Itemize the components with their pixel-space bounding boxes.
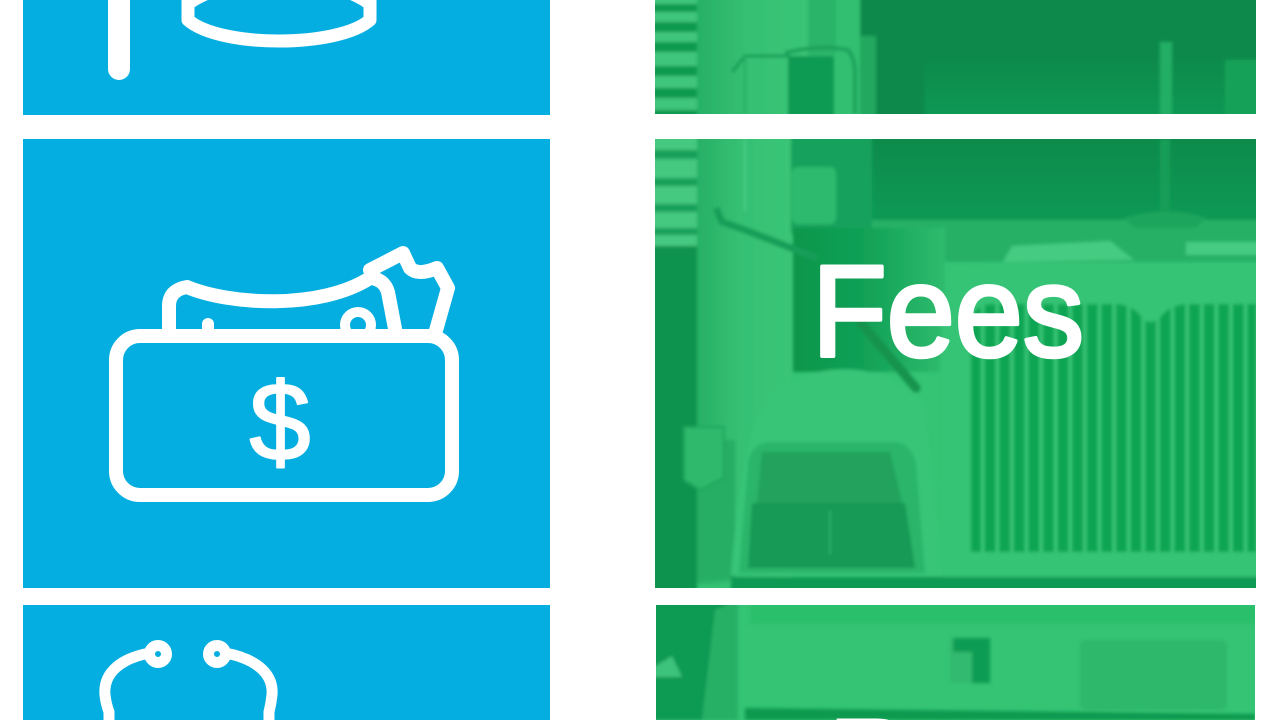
icon: partial stand and dish bbox=[119, 0, 370, 69]
truck: small vent bbox=[950, 638, 990, 683]
dollar sign: $ bbox=[249, 361, 311, 484]
truck: cab column bbox=[697, 134, 791, 584]
truck: mid tone strip bbox=[702, 600, 738, 720]
truck: lower shadow bbox=[745, 708, 1255, 720]
truck: windshield bbox=[860, 0, 1260, 120]
truck: wiper arm bbox=[860, 322, 916, 388]
truck: cab column bbox=[697, 0, 836, 114]
truck: top band bbox=[752, 605, 1255, 622]
truck: left dark edge bbox=[650, 600, 738, 720]
truck: hood bbox=[944, 303, 1256, 577]
icon part: note medallion bbox=[345, 312, 371, 338]
truck: fender bbox=[731, 369, 942, 575]
icon: stethoscope bbox=[105, 646, 272, 720]
icon part: wallet body bbox=[116, 336, 452, 495]
panel: bottom blue tile bbox=[23, 605, 550, 720]
truck: side marker bbox=[684, 427, 724, 490]
truck: lit patch bbox=[654, 656, 682, 677]
panel: middle green truck photo bbox=[650, 134, 1261, 592]
truck: headlight bbox=[739, 442, 925, 573]
icon part: note dot bbox=[202, 324, 214, 332]
truck: bumper shadow bbox=[730, 576, 1256, 588]
heading: Fees: Fees bbox=[812, 238, 1084, 384]
icon: wallet with cash bbox=[116, 253, 452, 495]
truck: mirror and column bbox=[732, 48, 855, 116]
truck: grille bbox=[960, 300, 1260, 560]
truck: windshield bbox=[872, 134, 1260, 262]
truck: door pillar and mirror bbox=[716, 134, 945, 372]
icon part: rear banknote bbox=[370, 253, 448, 334]
truck: side panel bbox=[1080, 640, 1227, 710]
panel: bottom green truck photo bbox=[650, 600, 1260, 720]
truck: left slats bbox=[655, 0, 698, 114]
panel: middle blue tile bbox=[23, 139, 550, 588]
panel: top green truck photo bbox=[650, 0, 1260, 120]
truck: building edge bbox=[650, 134, 697, 592]
panel: top blue tile bbox=[23, 0, 550, 115]
icon part: banknote bbox=[169, 278, 396, 334]
